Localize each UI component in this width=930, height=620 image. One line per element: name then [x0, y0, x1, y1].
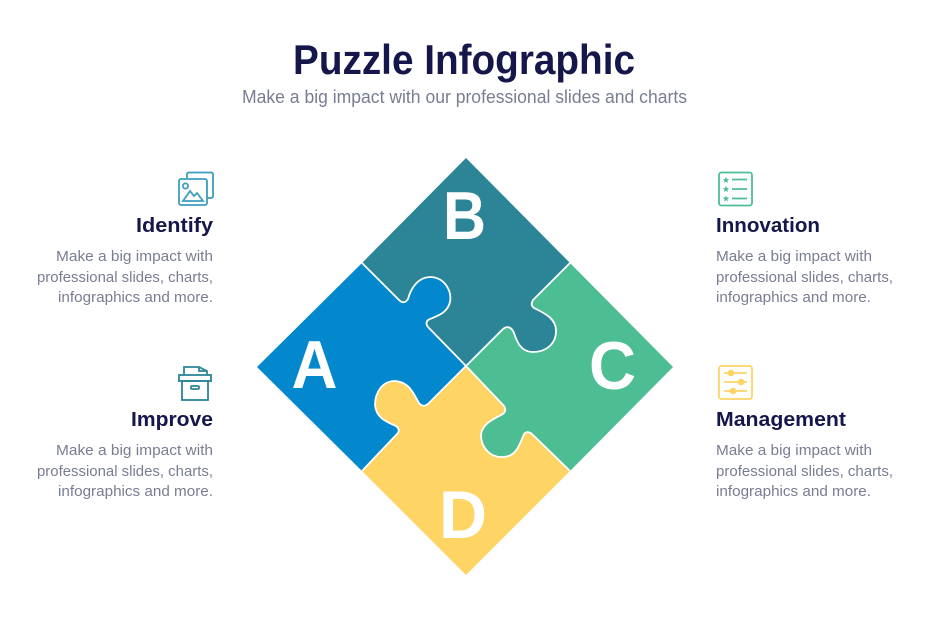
piece C: C — [589, 328, 636, 404]
body text: infographics and more. — [58, 484, 213, 500]
icon: archive box — [179, 367, 211, 400]
heading: Innovation — [716, 215, 820, 237]
body text: Make a big impact with — [56, 249, 213, 265]
icon: star list — [719, 172, 752, 206]
piece D: D — [439, 477, 487, 553]
body text: infographics and more. — [716, 290, 871, 306]
icon: sliders — [719, 366, 752, 399]
panel: Improve — [37, 367, 213, 500]
piece C — [466, 263, 673, 471]
body text — [37, 443, 213, 500]
body text — [716, 249, 893, 306]
heading: Management — [716, 409, 846, 431]
body text: Make a big impact with — [56, 443, 213, 459]
panel: Identify — [37, 172, 214, 306]
body text: infographics and more. — [716, 484, 871, 500]
subtitle: Make a big impact with our professional slides and charts — [242, 87, 687, 107]
body text: professional slides, charts, — [37, 270, 213, 286]
piece D — [362, 366, 570, 575]
icon: images — [179, 172, 213, 205]
piece B — [362, 158, 570, 366]
heading: Improve — [131, 409, 213, 431]
puzzle diagram — [257, 158, 673, 575]
body text — [716, 443, 893, 500]
piece A — [257, 263, 466, 471]
body text: professional slides, charts, — [37, 464, 213, 480]
body text: infographics and more. — [58, 290, 213, 306]
body text: Make a big impact with — [716, 249, 872, 265]
piece A: A — [292, 327, 338, 403]
heading: Identify — [136, 215, 214, 237]
panel: Management — [716, 366, 893, 500]
panel: Innovation — [716, 172, 893, 306]
piece B: B — [443, 178, 486, 254]
body text: Make a big impact with — [716, 443, 872, 459]
body text: professional slides, charts, — [716, 464, 893, 480]
body text: professional slides, charts, — [716, 270, 893, 286]
body text — [37, 249, 213, 306]
title: Puzzle Infographic — [293, 36, 635, 83]
